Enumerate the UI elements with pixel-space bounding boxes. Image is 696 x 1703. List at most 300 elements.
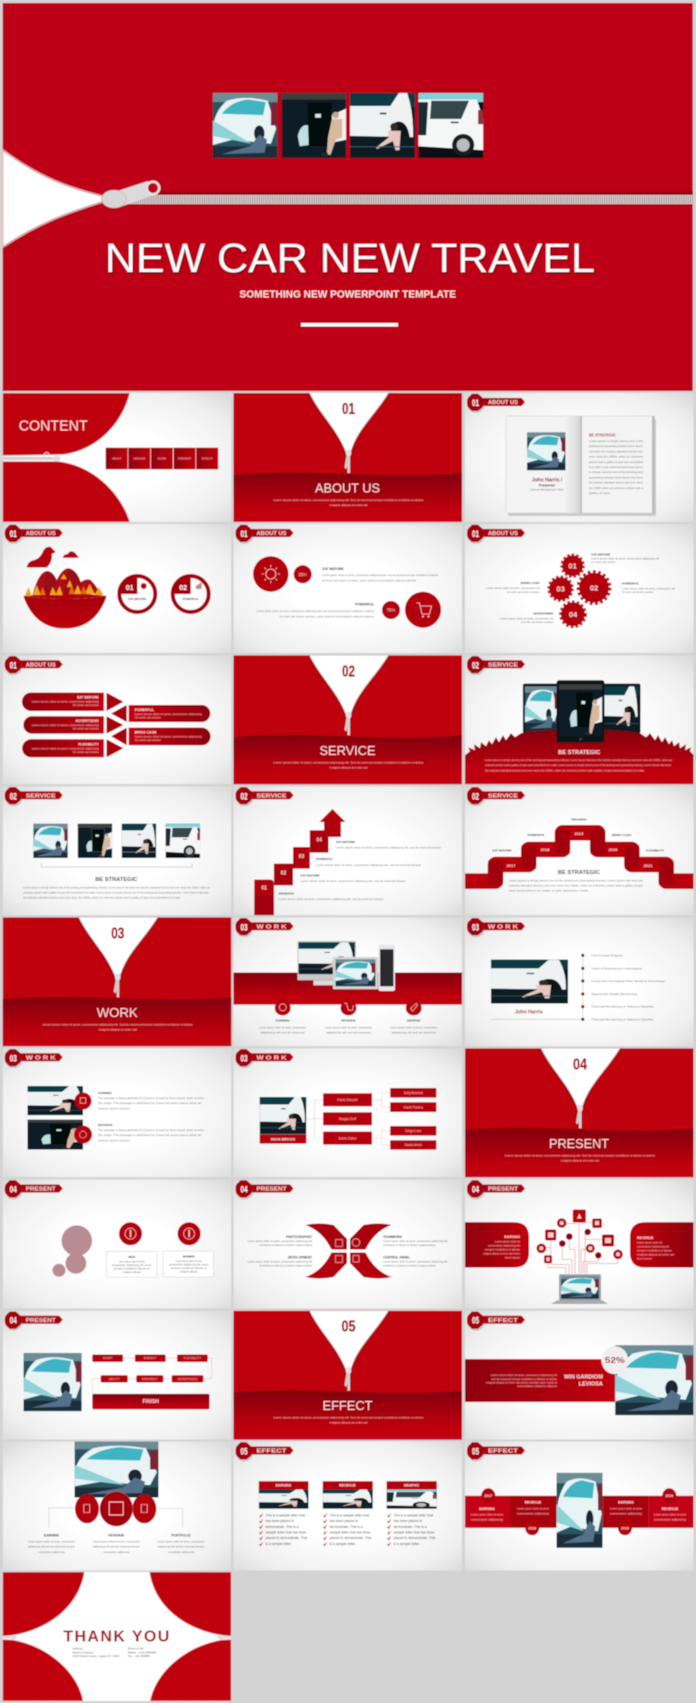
book body text: printer took a galley of type and scrambled xyxy=(589,461,644,464)
label: bring cash: BRING CASH xyxy=(521,581,540,585)
panel: ribbon timeline slide xyxy=(464,786,694,916)
pill: flexibility: Ut enim ad minim xyxy=(73,751,99,754)
body text xyxy=(274,499,424,507)
text: powerful: POWERFUL xyxy=(355,602,374,606)
book body text: has been the industry standard dummy text xyxy=(589,450,643,453)
earning item: the script. The passage is attributed by Cicero for lorem ipsum dolor sit xyxy=(98,1102,201,1105)
text: control panel: Lorem ipsum dolor sit amet, consectetur adipiscing elit xyxy=(383,1260,448,1264)
text blocks: Lorem ipsum dolor sit amet xyxy=(471,1514,503,1517)
book body text xyxy=(589,440,644,495)
pill: powerful: Lorem ipsum dolor sit amet, consectetur adipiscing xyxy=(135,713,202,716)
earning item: The passage is being attributed by Cicero in a book for lorem ipsum dolor sit amet xyxy=(98,1097,204,1100)
icon: right circle xyxy=(132,1494,156,1523)
tab xyxy=(5,1312,63,1331)
panel: year band slide xyxy=(464,1441,694,1571)
text: earning: Lorem ipsum dolor sit amet, consectetur xyxy=(28,1540,75,1544)
text: development: DEVELOPMENT xyxy=(288,1256,312,1260)
tab: W O R K xyxy=(256,924,287,930)
year labels xyxy=(484,1494,673,1530)
text blocks: EARNING xyxy=(618,1501,634,1505)
middle boxes: Waqas Goff xyxy=(339,1117,356,1121)
panel: effect section divider xyxy=(233,1310,462,1440)
tab xyxy=(236,918,294,937)
panel: checklist slide xyxy=(233,1441,462,1571)
label: bring cash: Ut enim ad minim veniam xyxy=(507,591,540,594)
tree nodes xyxy=(536,1210,623,1263)
icon: graphic pin: GRAPHIC xyxy=(407,1018,421,1022)
icon: revenue pin xyxy=(325,998,372,1034)
icon: graphic pin xyxy=(390,998,437,1034)
flow boxes row 1: START xyxy=(103,1356,113,1360)
text: control panel xyxy=(383,1256,448,1267)
flow boxes row 2: ABILITY xyxy=(109,1377,120,1381)
presenter role: Presenter xyxy=(539,484,556,488)
tab: 01 xyxy=(240,529,248,539)
column: earning: placed to demonstrate. This xyxy=(265,1536,307,1540)
label: eat before: EAT BEFORE xyxy=(591,552,610,556)
menu boxes: EFFECT xyxy=(202,456,213,460)
pill: bring cash: Ut enim ad minim xyxy=(135,739,161,742)
red band xyxy=(465,1359,615,1402)
body text: Lorem ipsum is simply dummy text of the printing and typesetting industry. Lorem Ipsum has been the industry standard dummy text ever since the 1500s, when an xyxy=(23,886,211,889)
column: earning: demonstrate. This is a xyxy=(265,1525,299,1529)
tab xyxy=(236,1442,294,1462)
book xyxy=(506,416,656,516)
pill: eat before: Lorem ipsum dolor sit amet, consectetur adipiscing xyxy=(32,700,99,703)
panel: john harris timeline slide xyxy=(464,917,694,1046)
tab xyxy=(467,1442,525,1462)
icon: revenue pin: adipiscing elit sed do eiusmod xyxy=(326,1031,371,1034)
person card: MAYA BROGG xyxy=(271,1137,295,1141)
zipper xyxy=(3,150,693,247)
column: graphic: GRAPHIC xyxy=(404,1484,420,1488)
card: men: tempor incididunt labore et xyxy=(114,1268,150,1270)
heading: WORK xyxy=(97,1005,138,1020)
column: revenue: This is a sample letter that xyxy=(330,1514,369,1518)
ribbon labels: EAT BEFORE xyxy=(492,848,512,852)
tab: W O R K xyxy=(488,924,519,930)
heading: THANK YOU xyxy=(63,1629,169,1646)
panel: content slide xyxy=(2,392,232,522)
timeline: Thermal Monitoring in Telecom Satellite xyxy=(591,1005,654,1009)
column: earning: This is a sample letter that xyxy=(265,1514,305,1518)
book body text: galley of type. xyxy=(589,492,611,495)
contact: phone xyxy=(128,1646,157,1658)
pill: advertising: ADVERTISING xyxy=(76,719,99,723)
pill: eat before: EAT BEFORE xyxy=(77,695,99,699)
stat: 25% xyxy=(294,565,312,583)
body text: Lorem ipsum dolor sit amet, consectetur adipiscing elit. Sed do eiusmod tempor incididunt ut labore et dolore xyxy=(274,761,424,764)
pill: bring cash: BRING CASH xyxy=(135,730,157,734)
tab: ABOUT US xyxy=(256,531,287,537)
hero subtitle: SOMETHING NEW POWERPOINT TEMPLATE xyxy=(240,288,456,300)
column: earning: is a sample letter. xyxy=(265,1542,292,1546)
text blocks: consectetur adipiscing xyxy=(610,1512,643,1516)
panel: x diagram slide xyxy=(233,1179,462,1309)
panel: org chart slide xyxy=(233,1048,462,1178)
icon: earning pin: EARNING xyxy=(276,1018,290,1022)
tab xyxy=(236,787,294,806)
column: graphic: is a sample letter. xyxy=(394,1542,420,1546)
donut: 02 powerful xyxy=(173,576,209,612)
body text xyxy=(43,1023,193,1031)
ribbon: 2020 xyxy=(609,847,618,852)
tab: 05 xyxy=(472,1316,479,1326)
panel: thank you slide xyxy=(2,1572,232,1702)
photo xyxy=(24,1353,82,1411)
ribbon labels: BRING CASH xyxy=(612,833,631,837)
panel: gears slide xyxy=(464,524,694,654)
timeline: Thermal Monitoring in Telecom Satellite xyxy=(591,1017,654,1021)
text: development: incididunt ut labore et dolore magna aliqua xyxy=(260,1264,313,1267)
finish bar: FINISH xyxy=(143,1399,159,1405)
icon: gear 03: 03 xyxy=(556,584,565,594)
body text xyxy=(274,761,424,769)
tab: 01 xyxy=(472,529,479,539)
label: advertising xyxy=(500,612,554,624)
pill: powerful: Ut enim ad minim xyxy=(135,716,161,719)
text: control panel: CONTROL PANEL xyxy=(383,1256,410,1260)
callout heading: LEVIOSA xyxy=(579,1381,603,1387)
tab: EFFECT xyxy=(488,1449,518,1455)
tab: 03 xyxy=(240,922,248,932)
tab: ABOUT US xyxy=(488,400,519,406)
year labels: 2018 xyxy=(528,1526,536,1530)
text: powerful xyxy=(316,857,421,867)
text blocks: Lorem ipsum dolor sit amet xyxy=(610,1508,642,1510)
left panel: earning: Lorem ipsum dolor sit xyxy=(495,1240,520,1244)
body text xyxy=(274,1417,424,1425)
tab: 05 xyxy=(472,1446,479,1456)
stat bubble: 52% xyxy=(605,1356,625,1365)
card: men xyxy=(106,1251,157,1277)
tab: 02 xyxy=(240,791,248,801)
menu boxes: WORK xyxy=(158,456,166,460)
tab xyxy=(467,918,525,937)
laptop xyxy=(551,1274,608,1304)
arrow xyxy=(320,809,346,837)
book body text: printing and typesetting industry lorem ipsum xyxy=(589,445,643,448)
icon: center circle xyxy=(100,1491,133,1526)
stat: 25%: 25% xyxy=(299,572,307,577)
card: men: consectetur adipiscing elit, lorem xyxy=(112,1264,152,1267)
tab: PRESENT xyxy=(26,1187,56,1193)
donut: 02 powerful: POWERFUL xyxy=(183,597,199,601)
tab: EFFECT xyxy=(488,1318,518,1324)
right panel: revenue: tempor incididunt ut labore xyxy=(637,1250,673,1252)
icon: gear 01: 01 xyxy=(568,562,577,570)
body text: Lorem ipsum dolor sit amet, consectetur adipiscing elit. Sed do eiusmod tempor incididunt ut labore et dolore xyxy=(505,1154,656,1157)
body text: Lorem ipsum dolor sit amet, consectetur adipiscing elit xyxy=(491,1374,557,1377)
left panel: earning xyxy=(465,1222,529,1268)
panel: service section divider xyxy=(233,654,462,785)
icon: men xyxy=(119,1222,142,1245)
text: eat before 2: Lorem ipsum dolor sit amet, consectetur adipiscing elit, sed do eiusmod tempor xyxy=(300,880,406,883)
text: revenue: consetetur adipscing xyxy=(103,1551,130,1554)
panel: about us section divider xyxy=(233,392,462,522)
column: graphic: This is a sample letter that xyxy=(394,1514,433,1518)
flow boxes row 2 xyxy=(101,1375,203,1382)
body text: and scrambled it to make a type specimen book. xyxy=(509,889,589,892)
arrows xyxy=(106,693,127,757)
tab xyxy=(467,525,525,544)
tab: 03 xyxy=(240,1053,248,1063)
stair step 04 xyxy=(310,830,328,853)
donut: 01 eat before: EAT BEFORE xyxy=(128,597,146,601)
book body text: Lorem ipsum is simply dummy text of the xyxy=(589,440,644,443)
finish bar xyxy=(92,1394,209,1409)
tab xyxy=(467,394,525,413)
text: revenue: Lorem ipsum dolor sit amet, consectetur xyxy=(93,1540,140,1544)
label: powerful: Lorem ipsum dolor sit amet, consectetur elit xyxy=(622,588,675,590)
body text: magna aliqua ut enim ad xyxy=(330,504,368,507)
tab: ABOUT US xyxy=(488,531,519,537)
text: earning xyxy=(28,1534,75,1554)
tab: ABOUT US xyxy=(26,531,56,537)
tab: 04 xyxy=(472,1184,479,1194)
text blocks: EARNING xyxy=(479,1507,495,1511)
ribbon labels: POWERFUL xyxy=(528,833,545,837)
person card xyxy=(260,1097,306,1144)
revenue item: The passage is being attributed by Cicero in a book for lorem ipsum dolor sit amet xyxy=(98,1129,204,1132)
icon: earning pin: adipiscing elit sed do eiusmod xyxy=(260,1031,305,1034)
hero divider bar xyxy=(301,323,398,326)
tab: W O R K xyxy=(256,1056,287,1062)
text: control panel: incididunt ut labore et dolore magna aliqua xyxy=(383,1264,436,1267)
ribbon: 2018 xyxy=(541,847,550,852)
year labels: 2020 xyxy=(665,1494,673,1498)
text: development xyxy=(248,1256,313,1267)
heading: CONTENT xyxy=(19,419,88,435)
tab: 01 xyxy=(472,398,479,408)
menu boxes: PRESENT xyxy=(178,456,191,460)
photo xyxy=(75,1442,158,1498)
tab: 02 xyxy=(10,791,17,801)
text blocks: REVENUE xyxy=(662,1507,679,1511)
node icons xyxy=(539,1214,620,1261)
column: earning: has been placed to xyxy=(265,1519,294,1523)
contact: address xyxy=(72,1646,120,1658)
panel: 52 percent slide xyxy=(464,1310,694,1440)
timeline: Customers leveraging Fiber Sensing Technology xyxy=(591,979,666,983)
red corners xyxy=(3,1572,231,1701)
panel: stairs slide xyxy=(233,786,462,916)
presenter role: Internet Management Team xyxy=(530,488,564,492)
tab xyxy=(5,525,63,544)
right panel: revenue: Lorem ipsum dolor sit xyxy=(637,1242,662,1244)
text: eat before xyxy=(322,567,439,582)
zipper pulls xyxy=(3,1635,231,1640)
panel: car photo three pins slide xyxy=(2,1441,232,1571)
icon: sun circle xyxy=(253,556,288,592)
name: John Harris xyxy=(515,1009,543,1015)
connectors xyxy=(306,1093,390,1145)
card: men: Lorem ipsum dolor sit amet xyxy=(119,1260,145,1264)
tab: 05 xyxy=(240,1446,248,1456)
icon: graphic pin: adipiscing elit sed do eiusmod xyxy=(392,1031,436,1034)
text: teamwork xyxy=(383,1235,448,1247)
stair step 04: 04 xyxy=(316,837,322,843)
panel: presenter book slide xyxy=(464,392,694,522)
book body text: ever since the 1500s, when an unknown xyxy=(589,456,644,459)
year labels: 2017 xyxy=(484,1494,492,1498)
left panel: earning: lorem ipsum xyxy=(505,1256,520,1260)
icon: graphic pin: Lorem ipsum dolor sit amet, consectetur xyxy=(390,1026,437,1029)
body text xyxy=(505,1154,656,1162)
tab: 03 xyxy=(10,1053,17,1063)
photos xyxy=(33,824,200,858)
text: eat before xyxy=(336,840,441,849)
body text: magna aliqua ut enim ad minim veniam quis nostrud xyxy=(486,1382,558,1385)
panel: circuit tree slide xyxy=(464,1179,694,1309)
panel: arrow pills slide xyxy=(2,655,232,784)
earning item: dolore lorem ipsum xyxy=(98,1107,130,1110)
left panel: earning: magna aliqua ut enim ad minim xyxy=(483,1252,520,1256)
column: graphic: placed to demonstrate. This xyxy=(394,1536,436,1540)
text: photographic: Lorem ipsum dolor sit amet, consectetur adipiscing elit xyxy=(248,1240,312,1243)
right panel: revenue: REVENUE xyxy=(637,1236,654,1240)
tab xyxy=(236,1180,294,1200)
text: eat before 2: EAT BEFORE xyxy=(300,873,320,877)
body text xyxy=(23,886,211,899)
right boxes: Hashi Parana xyxy=(404,1105,423,1109)
column: graphic: sample letter that has been xyxy=(394,1530,435,1534)
callout heading xyxy=(564,1375,603,1387)
presenter role xyxy=(530,484,564,492)
label: powerful: POWERFUL xyxy=(622,582,639,586)
text: revenue xyxy=(93,1534,140,1554)
front tablet xyxy=(557,680,604,743)
stat: 75%: 75% xyxy=(387,608,395,613)
card: men: magna aliqua xyxy=(123,1271,141,1274)
left panel: earning: tempor incididunt ut labore xyxy=(485,1248,521,1252)
panel: tablets slide xyxy=(464,655,694,785)
column: graphic xyxy=(387,1481,437,1546)
timeline: Years of Experience in Aerospace xyxy=(591,966,643,970)
pill: advertising: Ut enim ad minim xyxy=(73,727,99,730)
left panel: earning: EARNING xyxy=(504,1235,520,1239)
pill: bring cash xyxy=(129,728,211,745)
book body text: the industry standard dummy text ever since xyxy=(589,482,644,485)
icon: bird and cloud xyxy=(27,547,79,568)
stat: 75% xyxy=(382,601,400,619)
body text xyxy=(485,759,673,772)
callout heading: WIN GARDIOM xyxy=(564,1375,603,1381)
book body text: typesetting industry lorem ipsum has been xyxy=(589,476,644,479)
tab: 01 xyxy=(10,660,17,670)
text: revenue: REVENUE xyxy=(108,1534,125,1538)
body text: the industry standard dummy text ever since the 1500s, when an unknown printer took a galley of type and scrambled it to make. xyxy=(485,769,645,772)
text: development: Lorem ipsum dolor sit amet, consectetur adipiscing elit xyxy=(248,1260,312,1264)
stair step 01 xyxy=(254,880,274,915)
book body text: it to make a type specimen book lorem ipsum xyxy=(589,466,643,469)
column: revenue: is a sample letter. xyxy=(330,1542,356,1546)
text: revenue: adipiscing elit sed do eiusmod tempor xyxy=(93,1546,140,1548)
middle boxes: Fanis Stewart xyxy=(337,1098,358,1102)
tab: PRESENT xyxy=(488,1187,518,1193)
body text: magna aliqua ut enim ad xyxy=(99,1028,138,1031)
ribbon labels: ORGANGE xyxy=(571,817,587,821)
body text: magna aliqua ut enim ad xyxy=(330,1422,368,1425)
body text xyxy=(486,1374,558,1388)
tab: PRESENT xyxy=(26,1318,56,1324)
tab: 04 xyxy=(240,1184,248,1194)
tab xyxy=(5,1180,63,1200)
text: photographic xyxy=(248,1235,313,1247)
text blocks: Lorem ipsum dolor sit amet xyxy=(517,1508,549,1510)
hero title face: NEW CAR NEW TRAVEL xyxy=(105,235,595,281)
tab: SERVICE xyxy=(26,793,57,799)
book body text: the 1500s when an unknown printer took a xyxy=(589,487,644,490)
tab xyxy=(5,787,63,806)
tab: W O R K xyxy=(26,1056,56,1062)
label: advertising: Ut enim ad minim veniam xyxy=(521,621,554,624)
icon: left circle xyxy=(75,1494,99,1523)
heading: BE STRATEGIC xyxy=(558,750,600,756)
tab: SERVICE xyxy=(488,793,519,799)
menu boxes: SERVICE xyxy=(133,456,146,460)
text: powerful: Lorem ipsum dolor sit amet, consectetur adipiscing elit, sed do eiusmod tempor incididunt ut labore xyxy=(256,610,375,613)
panel: hero cover slide xyxy=(3,3,693,391)
text: photographic: incididunt ut labore et dolore magna aliqua xyxy=(260,1244,313,1247)
label: eat before: Ut enim ad minim xyxy=(591,561,615,564)
revenue item: the script. The passage is attributed by Cicero for lorem ipsum dolor sit xyxy=(98,1134,201,1137)
pill: eat before: Ut enim ad minim xyxy=(73,704,99,707)
earning item: EARNING xyxy=(98,1091,113,1095)
contact: phone: Mobile : +123 4556869 xyxy=(128,1650,157,1654)
contact: address: Mark's Company xyxy=(72,1650,94,1654)
tablets xyxy=(523,684,640,734)
text blocks: consectetur adipiscing xyxy=(517,1512,550,1516)
text: portfolio: consetetur adipscing xyxy=(168,1551,195,1554)
text: eat before: Lorem ipsum dolor sit amet, consectetur adipiscing elit, sed do eiusmod tempor xyxy=(336,846,441,849)
label: bring cash xyxy=(486,581,540,594)
label: powerful: Ut enim ad minim veniam xyxy=(622,591,654,594)
column: graphic: demonstrate. This is a xyxy=(394,1525,427,1529)
photo xyxy=(491,960,568,1004)
label: advertising: Lorem ipsum dolor sit amet, consectetur elit xyxy=(500,618,554,620)
circuit wires xyxy=(541,1216,618,1274)
tab: 04 xyxy=(10,1184,17,1194)
tab: EFFECT xyxy=(256,1449,286,1455)
flow boxes row 1: FLEXIBILITY xyxy=(184,1356,201,1360)
donut: 01 eat before xyxy=(119,576,155,612)
devices xyxy=(297,941,395,991)
contact: phone: Phone & Fax xyxy=(128,1646,144,1650)
text: oranage: Lorem ipsum dolor sit amet, consectetur adipiscing elit, sed do eiusmod tempor xyxy=(278,898,384,901)
stair step 02: 02 xyxy=(281,870,286,876)
tab xyxy=(5,1049,63,1068)
text: earning: EARNING xyxy=(44,1534,60,1538)
left panel: earning: consectetur adipiscing elit xyxy=(488,1244,520,1248)
column: revenue: placed to demonstrate. This xyxy=(330,1536,372,1540)
tab: SERVICE xyxy=(256,793,287,799)
right panel: revenue: consectetur adipiscing elit xyxy=(637,1246,669,1248)
pill: powerful: POWERFUL xyxy=(135,708,154,712)
hero photo strip xyxy=(213,93,483,158)
revenue item: REVENUE xyxy=(98,1123,113,1127)
body text: Lorem ipsum dolor sit amet, consectetur adipiscing elit. Sed do eiusmod tempor incididunt ut labore et dolore xyxy=(274,1417,424,1420)
grass hill xyxy=(465,728,694,784)
hero title: NEW CAR NEW TRAVEL xyxy=(106,236,596,282)
tab: ABOUT US xyxy=(26,662,56,668)
tab: 03 xyxy=(472,922,479,932)
middle boxes: Adam Dates xyxy=(338,1136,357,1140)
text: eat before: EAT BEFORE xyxy=(322,567,345,571)
right boxes: Sarah Amos xyxy=(405,1143,422,1147)
label: eat before xyxy=(591,552,660,564)
number: 04 xyxy=(573,1056,587,1073)
